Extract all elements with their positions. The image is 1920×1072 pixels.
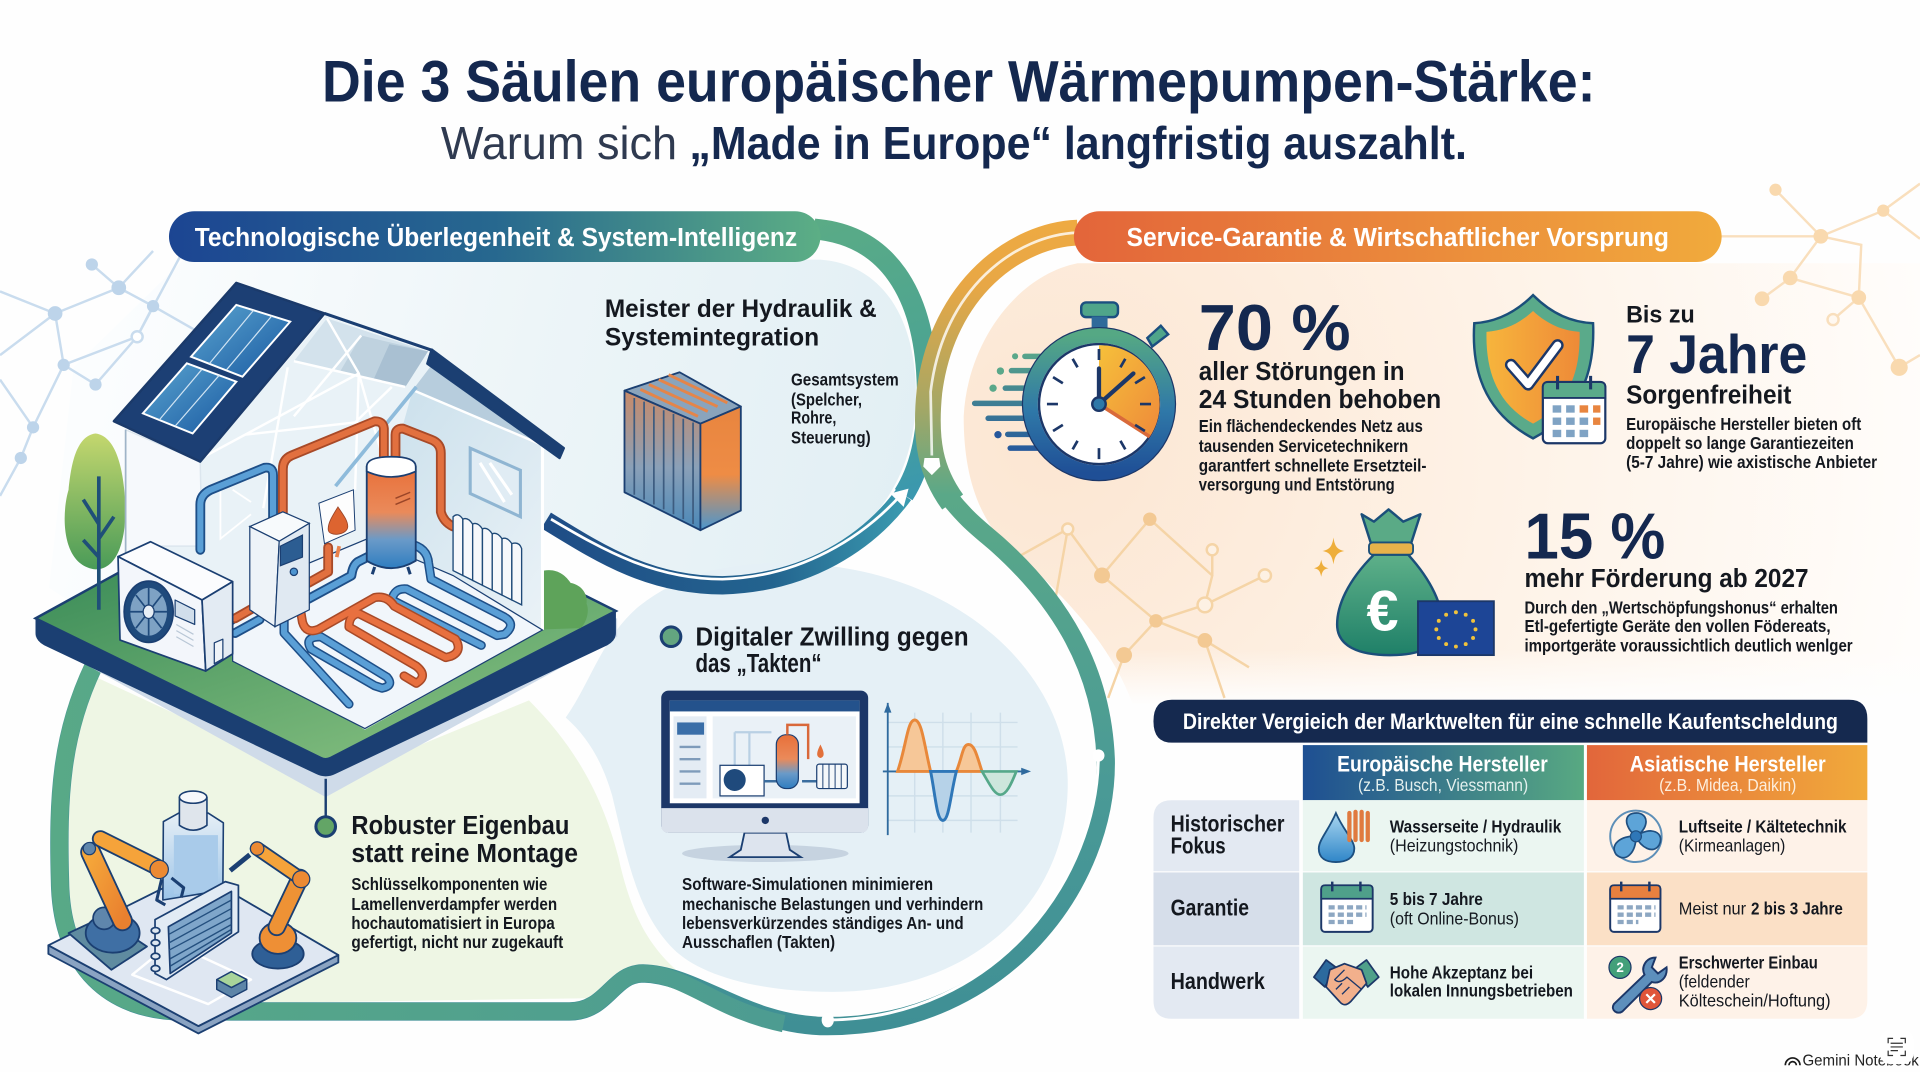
- platform: [36, 571, 617, 797]
- bush: [544, 570, 588, 629]
- window: [470, 448, 520, 517]
- icon: calendar European: [1321, 882, 1373, 932]
- factory base plate: [48, 872, 338, 1033]
- column head: European manufacturers: Europäische Hersteller: [1337, 751, 1548, 776]
- text: 7 Jahre: doppelt so lange Garantiezeiten: [1626, 433, 1854, 453]
- floor: [233, 539, 542, 729]
- lamella evaporator: [151, 882, 238, 980]
- panel: digital twin background: [566, 563, 1068, 992]
- icon: water drop with heating fins: [1319, 812, 1368, 862]
- heading pill: technology: [169, 211, 820, 262]
- icon: shield with calendar: [1474, 295, 1605, 443]
- text: robust build: [351, 812, 578, 952]
- row: historical focus: (Heizungstochnik): [1390, 836, 1518, 856]
- row: historical focus: Luftseite / Kältetechnik: [1679, 817, 1847, 837]
- panel: technology background: [49, 260, 916, 667]
- row: historical focus: (Kirmeanlagen): [1679, 836, 1785, 856]
- tree: [65, 433, 125, 610]
- row: trades: Költeschein/Hoftung): [1679, 991, 1831, 1011]
- wall unit: [250, 512, 309, 627]
- text: 15 percent: Etl-gefertigte Geräte den vollen Födereats,: [1524, 616, 1831, 636]
- row: historical focus: [1153, 800, 1867, 871]
- text: Digitaler Zwilling: [696, 623, 969, 678]
- radiator: [453, 515, 522, 605]
- title: [322, 50, 1596, 169]
- row: historical focus: Fokus: [1171, 832, 1226, 858]
- text: digital twin body: lebensverkürzendes ständiges An- und: [682, 913, 964, 933]
- factory machine column: [163, 791, 223, 900]
- row: trades: lokalen Innungsbetrieben: [1390, 981, 1573, 1001]
- ribbon: green from technology pill: [814, 229, 927, 495]
- text: digital twin body: Software-Simulationen minimieren: [682, 874, 933, 894]
- text: 70 percent: 24 Stunden behoben: [1199, 386, 1441, 414]
- text: 7 Jahre: Sorgenfreiheit: [1626, 381, 1792, 409]
- row: historical focus: Historischer: [1171, 810, 1285, 836]
- icon: wrench with warning badges: [1609, 956, 1667, 1013]
- row: trades: Hohe Akzeptanz bei: [1390, 962, 1533, 982]
- text: Gesamtsystem: (Spelcher,: [791, 389, 862, 409]
- ribbon: blue house connection with arrow: [546, 489, 909, 585]
- text: Meister der Hydraulik: Systemintegration: [605, 323, 819, 351]
- flame sign: [319, 490, 355, 557]
- text: robust build: Schlüsselkomponenten wie: [351, 874, 547, 894]
- glass roof: [200, 313, 564, 508]
- row: warranty: (oft Online-Bonus): [1390, 908, 1519, 928]
- text: digital twin body: mechanische Belastungen und verhindern: [682, 894, 983, 914]
- heading pill: technology: Technologische Überlegenheit & System-Intelligenz: [195, 223, 797, 252]
- column head: Asian manufacturers: Asiatische Hersteller: [1630, 751, 1826, 776]
- column head: European manufacturers: [1303, 745, 1584, 800]
- text: 15 percent: mehr Förderung ab 2027: [1524, 565, 1809, 593]
- panel: service background: [964, 263, 1920, 704]
- text: robust build: statt reine Montage: [351, 840, 578, 868]
- row: trades: Handwerk: [1171, 968, 1265, 994]
- text: robust build: Robuster Eigenbau: [351, 812, 569, 840]
- heading pill: service: Service-Garantie & Wirtschaftlicher Vorsprung: [1127, 224, 1669, 252]
- comparison table: [1153, 700, 1867, 1019]
- row: historical focus: Wasserseite / Hydraulik: [1390, 817, 1562, 837]
- text: 70 percent: garantfert schnellete Ersetzteil-: [1199, 455, 1427, 475]
- ribbon: lower left segment: [59, 667, 784, 1024]
- text: digital twin body: [682, 874, 983, 952]
- parts stack: [217, 972, 247, 997]
- solar roof: [114, 283, 324, 462]
- text: 15 percent: Durch den „Wertschöpfungshonus“ erhalten: [1524, 597, 1838, 617]
- robot arm left: [69, 839, 184, 970]
- text: digital twin body: Ausschaflen (Takten): [682, 932, 835, 952]
- heading pill: service: [1074, 211, 1722, 262]
- text: 7 Jahre: [1626, 302, 1877, 472]
- house walls: [126, 316, 542, 730]
- row: warranty: 2 bis 3 Jahre: [1751, 899, 1843, 919]
- chart: oscillation curve: [883, 703, 1031, 835]
- icon: handshake: [1314, 960, 1379, 1005]
- row: trades: [1153, 947, 1867, 1019]
- ribbon: central S curve: [59, 233, 1106, 1026]
- text: 15 percent: importgeräte voraussichtlich deutlich wenlger: [1524, 635, 1853, 655]
- text: Gesamtsystem: Rohre,: [791, 408, 836, 428]
- icon: stopwatch: [975, 302, 1176, 481]
- text: 70 percent: 70 %: [1199, 291, 1351, 364]
- text: 7 Jahre: Bis zu: [1626, 302, 1695, 329]
- floor heating coils: [284, 544, 511, 704]
- text: 70 percent: versorgung und Entstörung: [1199, 474, 1395, 494]
- text: Gesamtsystem: Steuerung): [791, 427, 871, 447]
- storage tank: [367, 457, 416, 574]
- icon: monitor with simulation: [661, 691, 868, 862]
- text: robust build: Lamellenverdampfer werden: [351, 894, 557, 914]
- text: 70 percent: aller Störungen in: [1199, 358, 1404, 386]
- text: 15 percent: 15 %: [1524, 499, 1665, 572]
- icon: scan button: [1880, 1030, 1914, 1064]
- text: Meister der Hydraulik: Meister der Hydraulik &: [605, 295, 877, 323]
- icon: fan: [1610, 811, 1662, 862]
- title: Die 3 Säulen europäischer Wärmepumpen-Stärke:: [322, 50, 1596, 115]
- icon: calendar Asian: [1610, 882, 1660, 932]
- icon: heat exchanger: [624, 372, 741, 530]
- text: 70 percent: [1199, 291, 1441, 494]
- network decoration: blue: [0, 250, 196, 496]
- text: 7 Jahre: Europäische Hersteller bieten oft: [1626, 414, 1861, 434]
- watermark: Gemini Notebook: [1802, 1052, 1919, 1069]
- table heading bar: Direkter Vergieich der Marktwelten für eine schnelle Kaufentscheldung: [1183, 709, 1838, 734]
- column head: Asian manufacturers: [1587, 745, 1867, 800]
- row: trades: (feldender: [1679, 972, 1750, 992]
- text: robust build: hochautomatisiert in Europa: [351, 913, 555, 933]
- node: ribbon dots: [822, 749, 1104, 1027]
- row: warranty: [1153, 872, 1867, 945]
- panel fade: service bottom: [1108, 649, 1920, 705]
- text: 70 percent: tausenden Servicetechnikern: [1199, 436, 1408, 456]
- network decoration: orange top right: [1720, 184, 1920, 376]
- title: „Made in Europe“ langfristig auszahlt.: [689, 117, 1467, 169]
- text: robust build: gefertigt, nicht nur zugekauft: [351, 932, 564, 952]
- marker: digital twin: [661, 627, 681, 647]
- illustration: robot factory: [48, 791, 338, 1033]
- panel: robust build background: [68, 673, 676, 1004]
- text: Gesamtsystem: [791, 370, 899, 447]
- text: 7 Jahre: 7 Jahre: [1626, 323, 1807, 385]
- row: trades: Erschwerter Einbau: [1679, 953, 1818, 973]
- row: warranty: Meist nur: [1679, 899, 1746, 919]
- icon: wrench with warning badges: 2: [1616, 960, 1624, 975]
- text: 7 Jahre: (5-7 Jahre) wie axistische Anbieter: [1626, 452, 1877, 472]
- row: warranty: Garantie: [1171, 894, 1249, 920]
- table heading bar: [1153, 700, 1867, 743]
- connector: house to robust build: [316, 779, 336, 836]
- text: Meister der Hydraulik: [605, 295, 877, 351]
- icon: money bag with EU flag: €: [1367, 580, 1399, 644]
- heating and cooling pipes: [200, 421, 453, 633]
- network decoration: orange centre: [1009, 512, 1271, 698]
- text: Digitaler Zwilling: das „Takten“: [696, 650, 822, 678]
- row: warranty: 5 bis 7 Jahre: [1390, 889, 1483, 909]
- outdoor air unit: [118, 542, 233, 671]
- text: Gesamtsystem: Gesamtsystem: [791, 370, 899, 390]
- speed lines: [975, 356, 1048, 448]
- icon: money bag with EU flag: [1314, 509, 1494, 655]
- column head: Asian manufacturers: (z.B. Midea, Daikin): [1659, 775, 1796, 795]
- robot arm right: [230, 842, 310, 969]
- text: 70 percent: Ein flächendeckendes Netz aus: [1199, 416, 1423, 436]
- illustration: cutaway house on platform: [36, 283, 617, 797]
- column head: European manufacturers: (z.B. Busch, Viessmann): [1358, 775, 1528, 795]
- text: 15 percent: [1524, 499, 1853, 655]
- title: Warum sich: [441, 117, 677, 169]
- text: Digitaler Zwilling: Digitaler Zwilling gegen: [696, 623, 969, 651]
